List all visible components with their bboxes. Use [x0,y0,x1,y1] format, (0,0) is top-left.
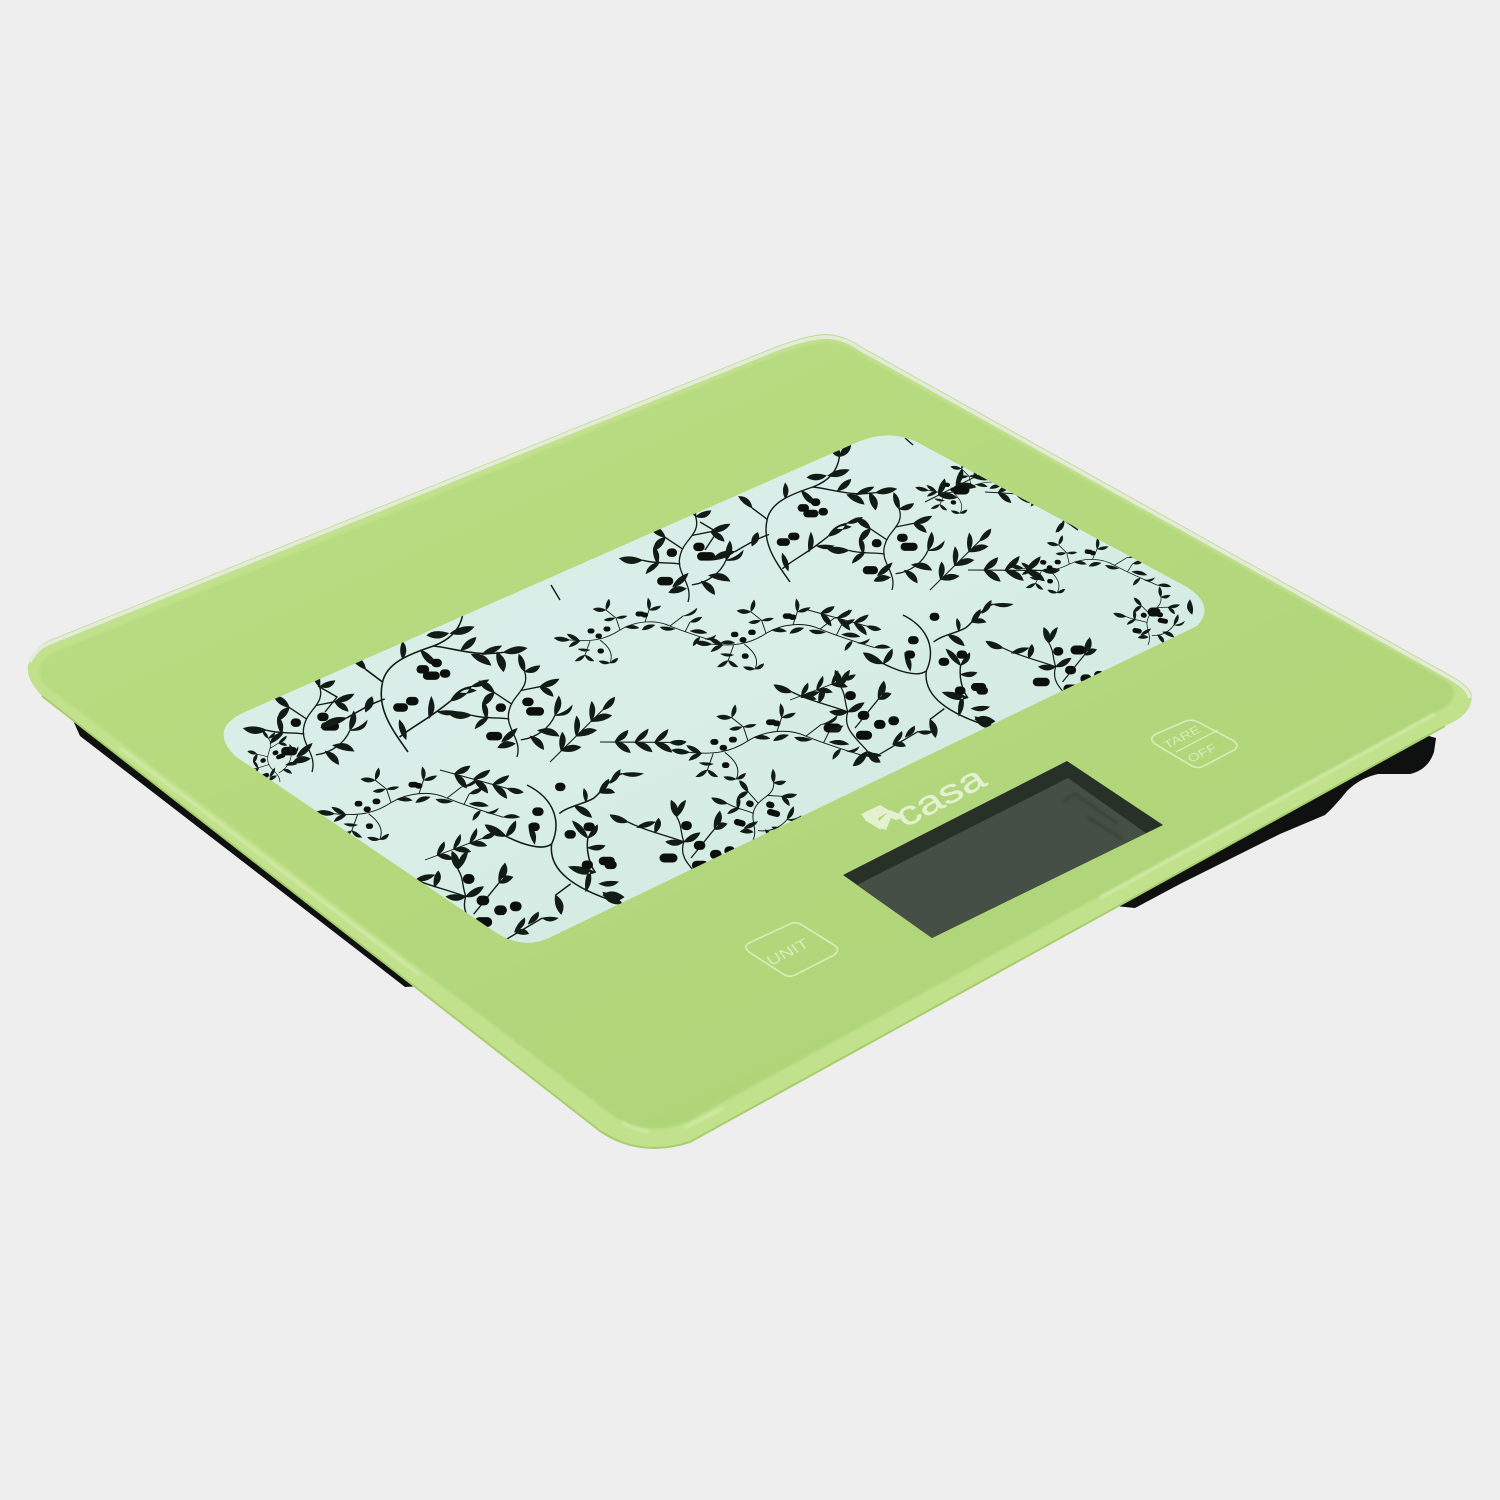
brand logo [861,759,994,834]
button label: UNIT [763,936,812,969]
casa wordmark: casa [887,759,994,834]
divider [1176,730,1218,752]
front rim highlights [120,714,1435,1131]
kitchen scale [28,334,1472,1148]
button label bottom: OFF [1185,741,1219,765]
outer lower edge line [42,696,1445,1148]
UNIT button [746,923,838,976]
LCD display [843,761,1163,938]
floral print panel [224,436,1205,955]
faint segments [1062,794,1124,840]
TARE OFF button [1152,720,1237,768]
display recess [843,761,1163,938]
logo mark [861,805,906,830]
panel background [224,436,1205,943]
glass top surface [39,342,1454,1129]
button label top: TARE [1161,723,1203,751]
olive branch pattern [228,438,1193,955]
glass plate rim [28,334,1472,1148]
dark base under the glass [72,700,1436,987]
button outline [746,923,838,976]
button outline [1152,720,1237,768]
top edge highlight [30,337,1470,698]
display screen [857,778,1146,938]
